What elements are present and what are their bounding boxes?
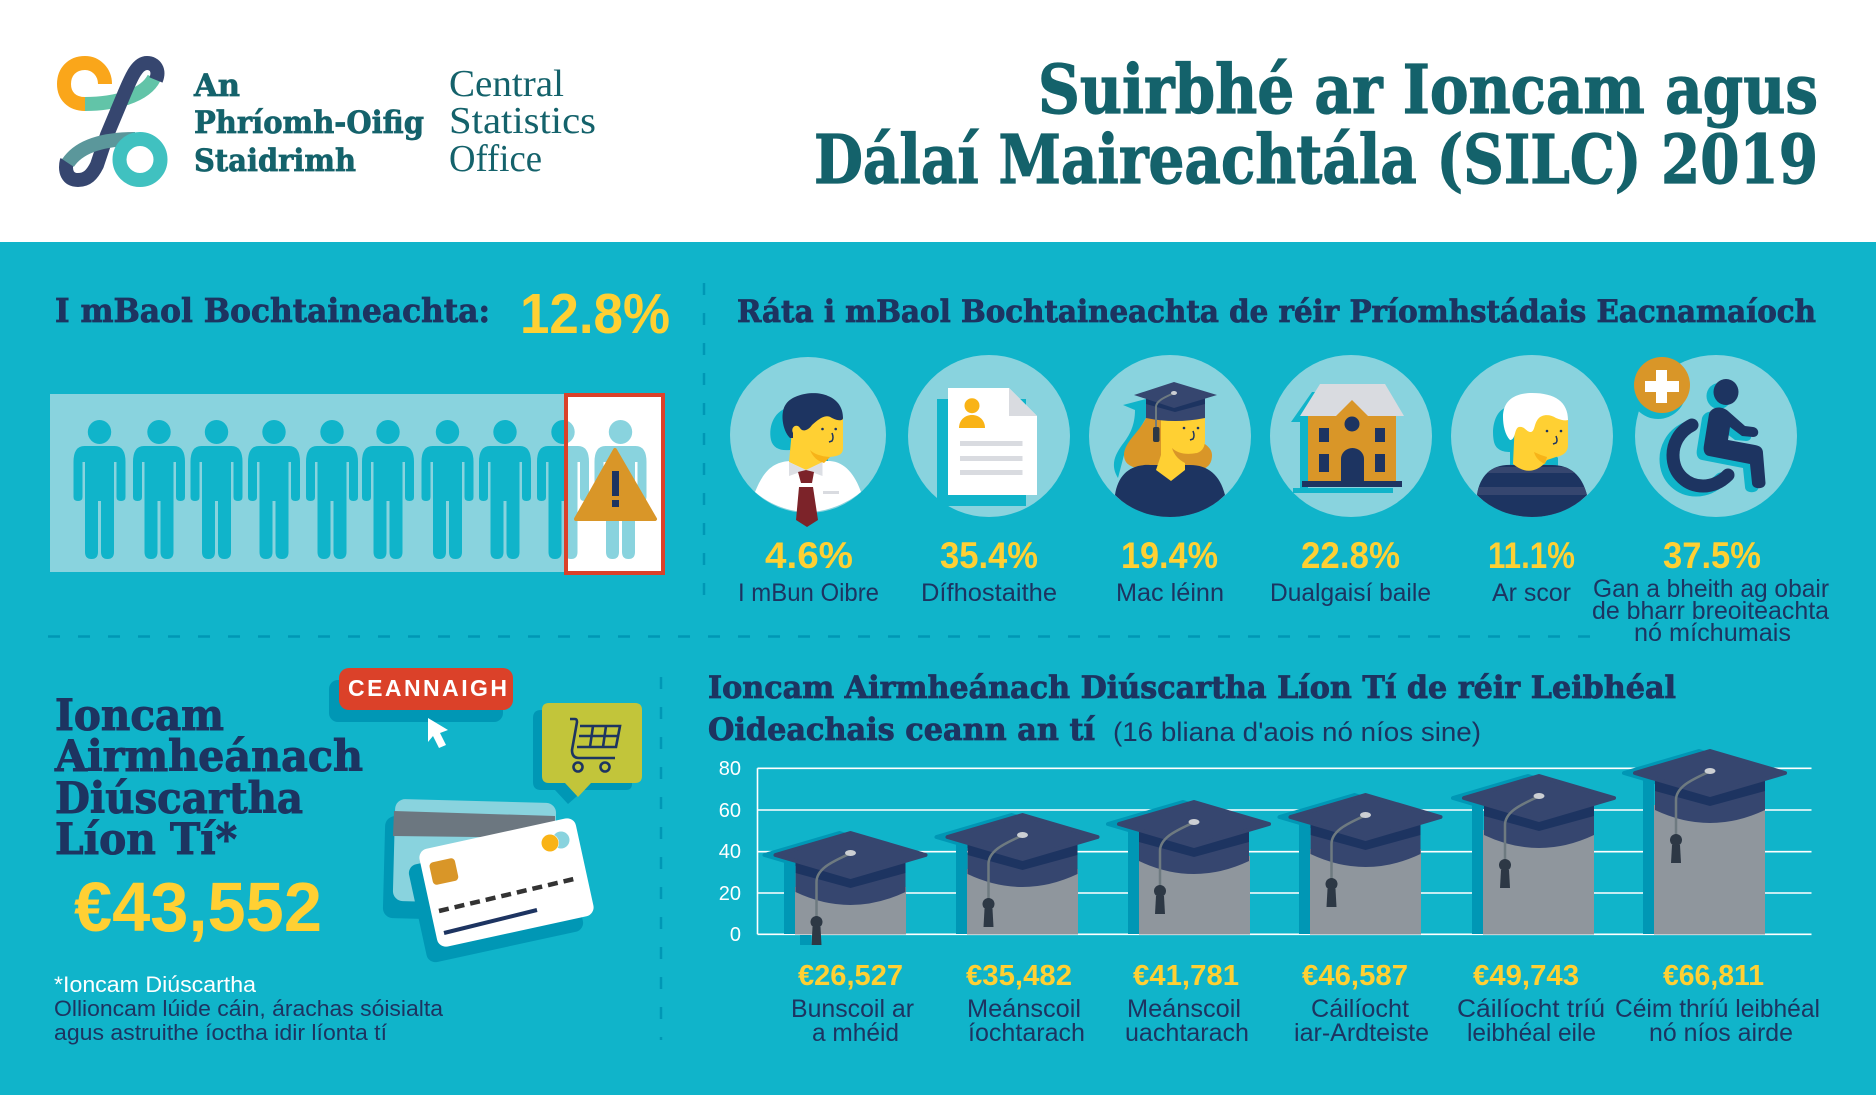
heading: chart title: Ioncam Airmheánach Diúscartha Líon Tí de réir Leibhéal bbox=[708, 670, 1676, 706]
labels: economic status rates bbox=[765, 535, 1761, 576]
logo text: Irish: An bbox=[193, 68, 240, 104]
chart values bbox=[798, 960, 1764, 992]
labels: economic status names: Dualgaisí baile bbox=[1270, 579, 1431, 607]
chart category labels: nó níos airde bbox=[1649, 1019, 1793, 1047]
chart values: €26,527 bbox=[798, 960, 903, 992]
labels: economic status rates: 22.8% bbox=[1301, 535, 1400, 576]
chart category labels bbox=[791, 995, 1820, 1047]
icon: retired person bbox=[1451, 355, 1613, 517]
footnote bbox=[54, 972, 444, 1045]
chart category labels: Bunscoil ar bbox=[791, 995, 914, 1023]
labels: economic status names: de bharr breoiteachta bbox=[1592, 597, 1829, 625]
heading: median income: Diúscartha bbox=[55, 774, 303, 824]
labels: economic status names: I mBun Oibre bbox=[738, 579, 879, 607]
icon: shopping cart bubble bbox=[533, 703, 642, 804]
logo mark bbox=[64, 63, 160, 180]
heading: median income bbox=[54, 691, 363, 865]
footnote: *Ioncam Diúscartha bbox=[54, 972, 257, 997]
chart category labels: Meánscoil bbox=[1127, 995, 1241, 1023]
axis labels bbox=[719, 758, 741, 946]
labels: economic status rates: 37.5% bbox=[1663, 535, 1761, 576]
bar 4 bbox=[1280, 795, 1440, 934]
icon: CV document bbox=[908, 355, 1070, 517]
axis labels: 60 bbox=[719, 800, 741, 822]
chart values: €41,781 bbox=[1133, 960, 1239, 992]
axis labels: 0 bbox=[730, 924, 741, 946]
icon: credit cards bbox=[383, 799, 595, 964]
footnote: Ollioncam lúide cáin, árachas sóisialta bbox=[54, 996, 444, 1021]
button: buy: CEANNAIGH bbox=[348, 675, 507, 701]
labels: economic status rates: 35.4% bbox=[940, 535, 1038, 576]
button: buy bbox=[329, 668, 513, 722]
logo text: English: Office bbox=[449, 138, 542, 180]
title bbox=[814, 50, 1818, 199]
background panel bbox=[0, 242, 1876, 1095]
logo text: Irish bbox=[193, 68, 424, 179]
chart category labels: Meánscoil bbox=[967, 995, 1081, 1023]
icon: employee bbox=[730, 357, 886, 527]
heading: median income: Ioncam bbox=[55, 691, 224, 741]
axis labels: 20 bbox=[719, 883, 741, 905]
chart category labels: leibhéal eile bbox=[1467, 1019, 1596, 1047]
heading: risk by economic status: Ráta i mBaol Bochtaineachta de réir Príomhstádais Eacnamaíoch bbox=[737, 294, 1816, 330]
labels: economic status rates: 4.6% bbox=[765, 535, 853, 576]
icon: cursor bbox=[428, 718, 448, 748]
heading: chart title: Oideachais ceann an tí bbox=[708, 712, 1095, 748]
stat: 12.8%: 12.8% bbox=[520, 282, 670, 346]
icon: student bbox=[1089, 355, 1251, 517]
bar 5 bbox=[1453, 776, 1614, 934]
axis labels: 40 bbox=[719, 841, 741, 863]
stat: €43,552: €43,552 bbox=[74, 868, 322, 946]
chart values: €49,743 bbox=[1473, 960, 1579, 992]
labels: economic status rates: 11.1% bbox=[1488, 535, 1575, 576]
logo text: Irish: Phríomh-Oifig bbox=[194, 105, 424, 141]
chart category labels: a mhéid bbox=[812, 1019, 899, 1047]
bar 3 bbox=[1108, 802, 1269, 934]
chart category labels: íochtarach bbox=[968, 1019, 1085, 1047]
heading: median income: Líon Tí* bbox=[55, 815, 237, 865]
header band bbox=[0, 0, 1876, 242]
icon: home duties bbox=[1270, 355, 1432, 517]
logo text: English: Central bbox=[449, 63, 564, 105]
chart values: €66,811 bbox=[1663, 960, 1764, 992]
labels: economic status names: Mac léinn bbox=[1116, 579, 1224, 607]
chart category labels: Cáilíocht tríú bbox=[1457, 995, 1605, 1023]
bar 1 bbox=[764, 833, 926, 945]
chart values: €35,482 bbox=[966, 960, 1072, 992]
logo text: Irish: Staidrimh bbox=[194, 143, 356, 179]
logo text: English: Statistics bbox=[449, 100, 596, 142]
chart category labels: uachtarach bbox=[1125, 1019, 1249, 1047]
heading: median income: Airmheánach bbox=[54, 732, 363, 782]
icon: disability bbox=[1630, 355, 1797, 517]
labels: economic status names: Gan a bheith ag obair bbox=[1593, 575, 1829, 603]
bar chart: income by education bbox=[719, 751, 1812, 946]
logo text: English bbox=[449, 63, 596, 180]
heading: chart title bbox=[708, 670, 1676, 748]
footnote: agus astruithe íoctha idir líonta tí bbox=[54, 1020, 387, 1045]
heading: at risk of poverty: I mBaol Bochtaineachta: bbox=[55, 291, 490, 330]
pictogram: ten people, one at risk bbox=[50, 394, 663, 573]
chart values: €46,587 bbox=[1302, 960, 1408, 992]
labels: economic status names bbox=[738, 575, 1829, 647]
chart category labels: Cáilíocht bbox=[1311, 995, 1409, 1023]
bar 2 bbox=[936, 815, 1098, 934]
labels: economic status rates: 19.4% bbox=[1121, 535, 1218, 576]
chart category labels: iar-Ardteiste bbox=[1294, 1019, 1429, 1047]
labels: economic status names: Dífhostaithe bbox=[921, 579, 1057, 607]
chart subtitle: (16 bliana d'aois nó níos sine) bbox=[1113, 717, 1481, 747]
chart category labels: Céim thríú leibhéal bbox=[1615, 995, 1820, 1023]
bar 6 bbox=[1624, 751, 1785, 934]
labels: economic status names: nó míchumais bbox=[1634, 619, 1791, 647]
axis labels: 80 bbox=[719, 758, 741, 780]
labels: economic status names: Ar scor bbox=[1492, 579, 1571, 607]
